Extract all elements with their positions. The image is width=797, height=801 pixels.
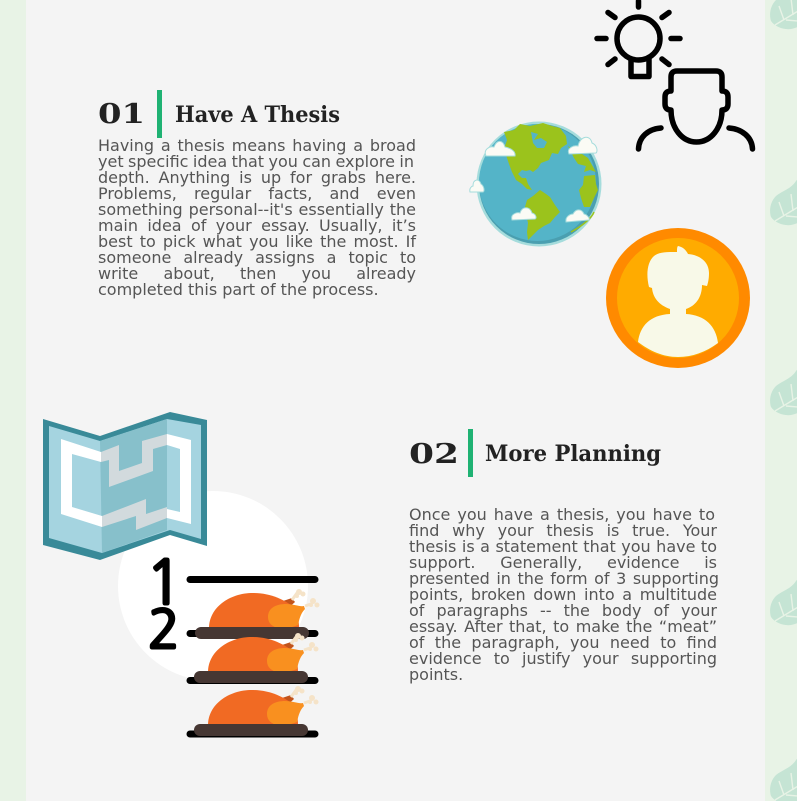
icon: light bulb — [597, 1, 680, 76]
section 02 body text: thesis is a statement that you have to — [409, 537, 717, 556]
section 02 body text: support. Generally, evidence is — [409, 553, 717, 572]
icon: avatar badge — [606, 228, 750, 368]
section 02 number: 02 — [409, 439, 459, 470]
white circle backdrop — [118, 491, 308, 681]
section 01 heading: Have A Thesis — [175, 102, 340, 128]
numeral one: 1 — [146, 553, 182, 613]
section 01 body text: write about, then you already — [98, 264, 416, 283]
section 02 body text: find why your thesis is true. Your — [409, 521, 717, 540]
section 02 heading: More Planning — [485, 441, 661, 467]
section 02 body text: Once you have a thesis, you have to — [409, 505, 715, 524]
section 02 body text: of the paragraph, you need to find — [409, 633, 717, 652]
section 01 number: 01 — [98, 99, 145, 130]
icon: roast turkey bottom — [194, 686, 318, 736]
section 02 accent bar — [468, 429, 473, 477]
icon: roast turkey top — [195, 589, 320, 639]
section 01 body text: someone already assigns a topic to — [98, 248, 416, 267]
section 01 body text: Having a thesis means having a broad — [98, 136, 416, 155]
section 01 accent bar — [157, 90, 162, 138]
icon: folded map — [43, 412, 207, 560]
section 01 body text: something personal--it's essentially the — [98, 200, 416, 219]
section 01 body text: best to pick what you like the most. If — [98, 232, 416, 251]
section 01 body text: Problems, regular facts, and even — [98, 184, 416, 203]
icon: roast turkey middle — [194, 633, 318, 683]
numeral two: 2 — [148, 604, 180, 656]
section 01 body text — [98, 136, 416, 299]
list lines — [190, 580, 315, 734]
section 02 body text: points, broken down into a multitude — [409, 585, 717, 604]
section 02 body text: points. — [409, 665, 463, 684]
section 01 body text: completed this part of the process. — [98, 280, 379, 299]
right side strip with leaf pattern — [765, 0, 797, 801]
icon: person outline — [638, 71, 752, 149]
section 02 body text: evidence to justify your supporting — [409, 649, 717, 668]
section 01 body text: yet specific idea that you can explore in — [98, 152, 414, 171]
section 01 body text: depth. Anything is up for grabs here. — [98, 168, 416, 187]
section 02 body text: presented in the form of 3 supporting — [409, 569, 719, 588]
icon: globe — [470, 122, 602, 246]
left side strip — [0, 0, 26, 801]
section 02 body text — [409, 505, 719, 684]
section 02 body text: essay. After that, to make the “meat” — [409, 617, 717, 636]
section 02 body text: of paragraphs -- the body of your — [409, 601, 717, 620]
section 01 body text: main idea of your essay. Usually, it’s — [98, 216, 416, 235]
